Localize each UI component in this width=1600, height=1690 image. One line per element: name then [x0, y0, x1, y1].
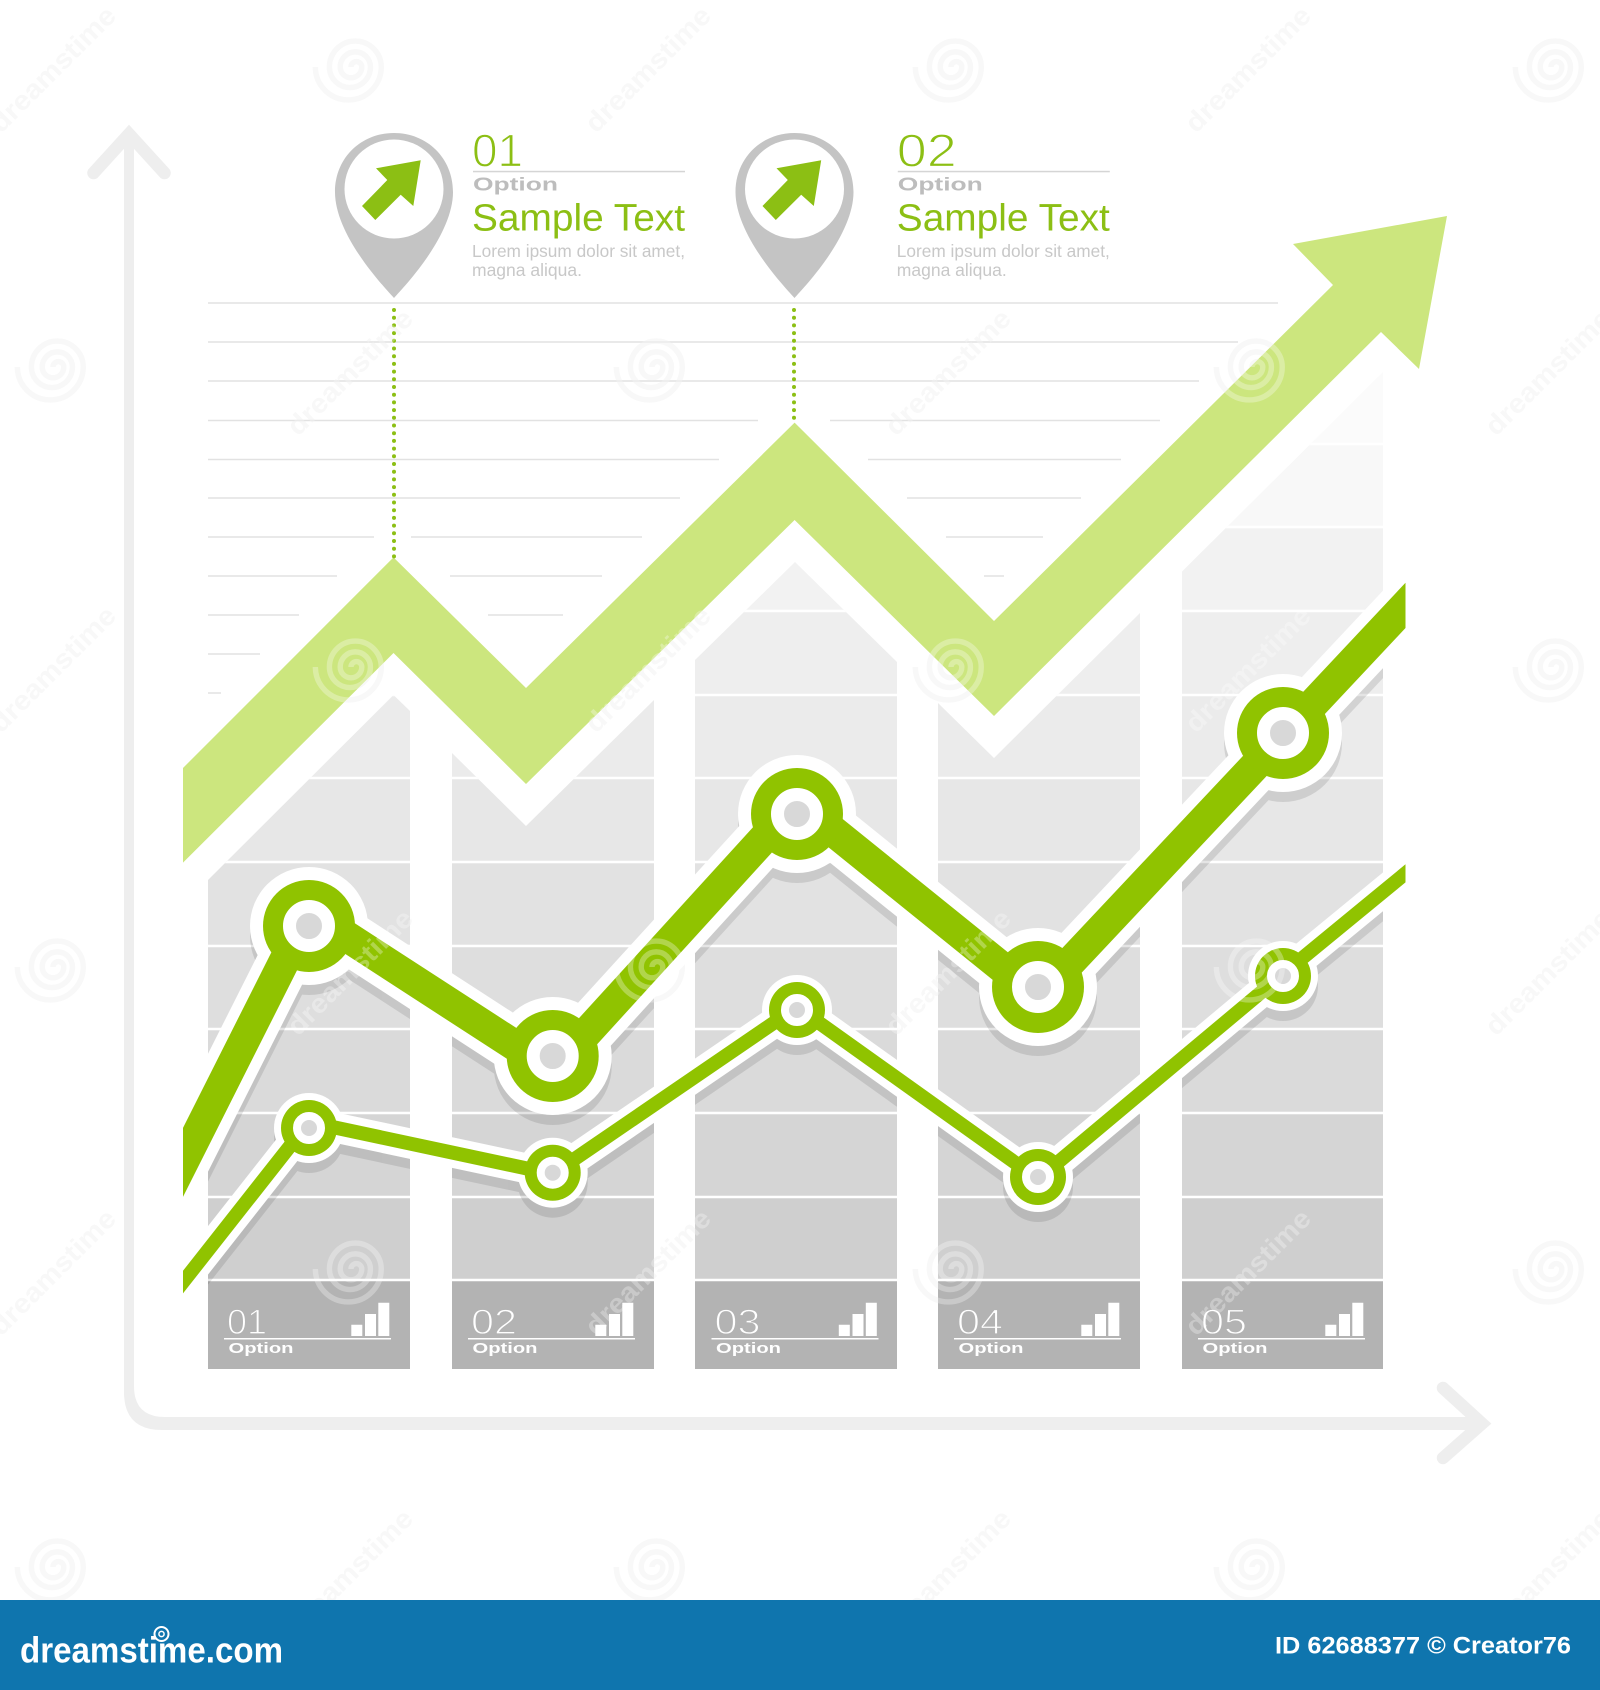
column footer 04 — [954, 1303, 1121, 1357]
thin green line with markers — [183, 864, 1406, 1294]
pin marker 02 — [736, 133, 854, 298]
axes: vertical and horizontal arrows — [94, 134, 1484, 1458]
callout text 02: Lorem ipsum dolor sit amet, — [897, 241, 1110, 261]
column footer 03 — [712, 1303, 878, 1357]
line and marker shadows on the columns — [208, 668, 1383, 1284]
column footer 04: 04 — [957, 1303, 1003, 1342]
column footer 02: 02 — [471, 1303, 517, 1342]
callout text 01: 01 — [472, 125, 523, 177]
big light green zig-zag arrow — [183, 216, 1447, 863]
pin marker 01 — [335, 133, 453, 298]
background gridlines behind arrow — [208, 303, 1278, 693]
column footer 01: Option — [228, 1341, 294, 1357]
column footer 05: Option — [1202, 1341, 1268, 1357]
column footer 05 — [1198, 1303, 1365, 1357]
callout text 02: Option — [898, 174, 983, 195]
column footer 01: 01 — [227, 1303, 267, 1342]
footer banner: dreamstime.com — [20, 1630, 283, 1671]
column footer 02: Option — [472, 1341, 538, 1357]
callout text 01: Lorem ipsum dolor sit amet, — [472, 241, 685, 261]
callout text 02: magna aliqua. — [897, 260, 1007, 280]
callout text 01: Option — [473, 174, 558, 195]
thick green line with markers — [183, 582, 1406, 1197]
column footer 05: 05 — [1201, 1303, 1247, 1342]
footer banner — [0, 1600, 1600, 1690]
column footer 03: 03 — [714, 1303, 760, 1342]
callout text 02: 02 — [897, 125, 957, 177]
column footer 03: Option — [716, 1341, 781, 1357]
bar columns with stepped grey bands — [208, 528, 1383, 1369]
column footer 02 — [468, 1303, 635, 1357]
callout text 02 — [897, 125, 1110, 280]
callout text 01: Sample Text — [472, 198, 685, 240]
footer banner: ID 62688377 © Creator76 — [1275, 1632, 1571, 1659]
callout text 01: magna aliqua. — [472, 260, 582, 280]
column footer 04: Option — [958, 1341, 1024, 1357]
column footer 01 — [224, 1303, 391, 1357]
callout text 02: Sample Text — [897, 198, 1110, 240]
dotted connector lines — [394, 310, 794, 557]
callout text 01 — [472, 125, 685, 280]
